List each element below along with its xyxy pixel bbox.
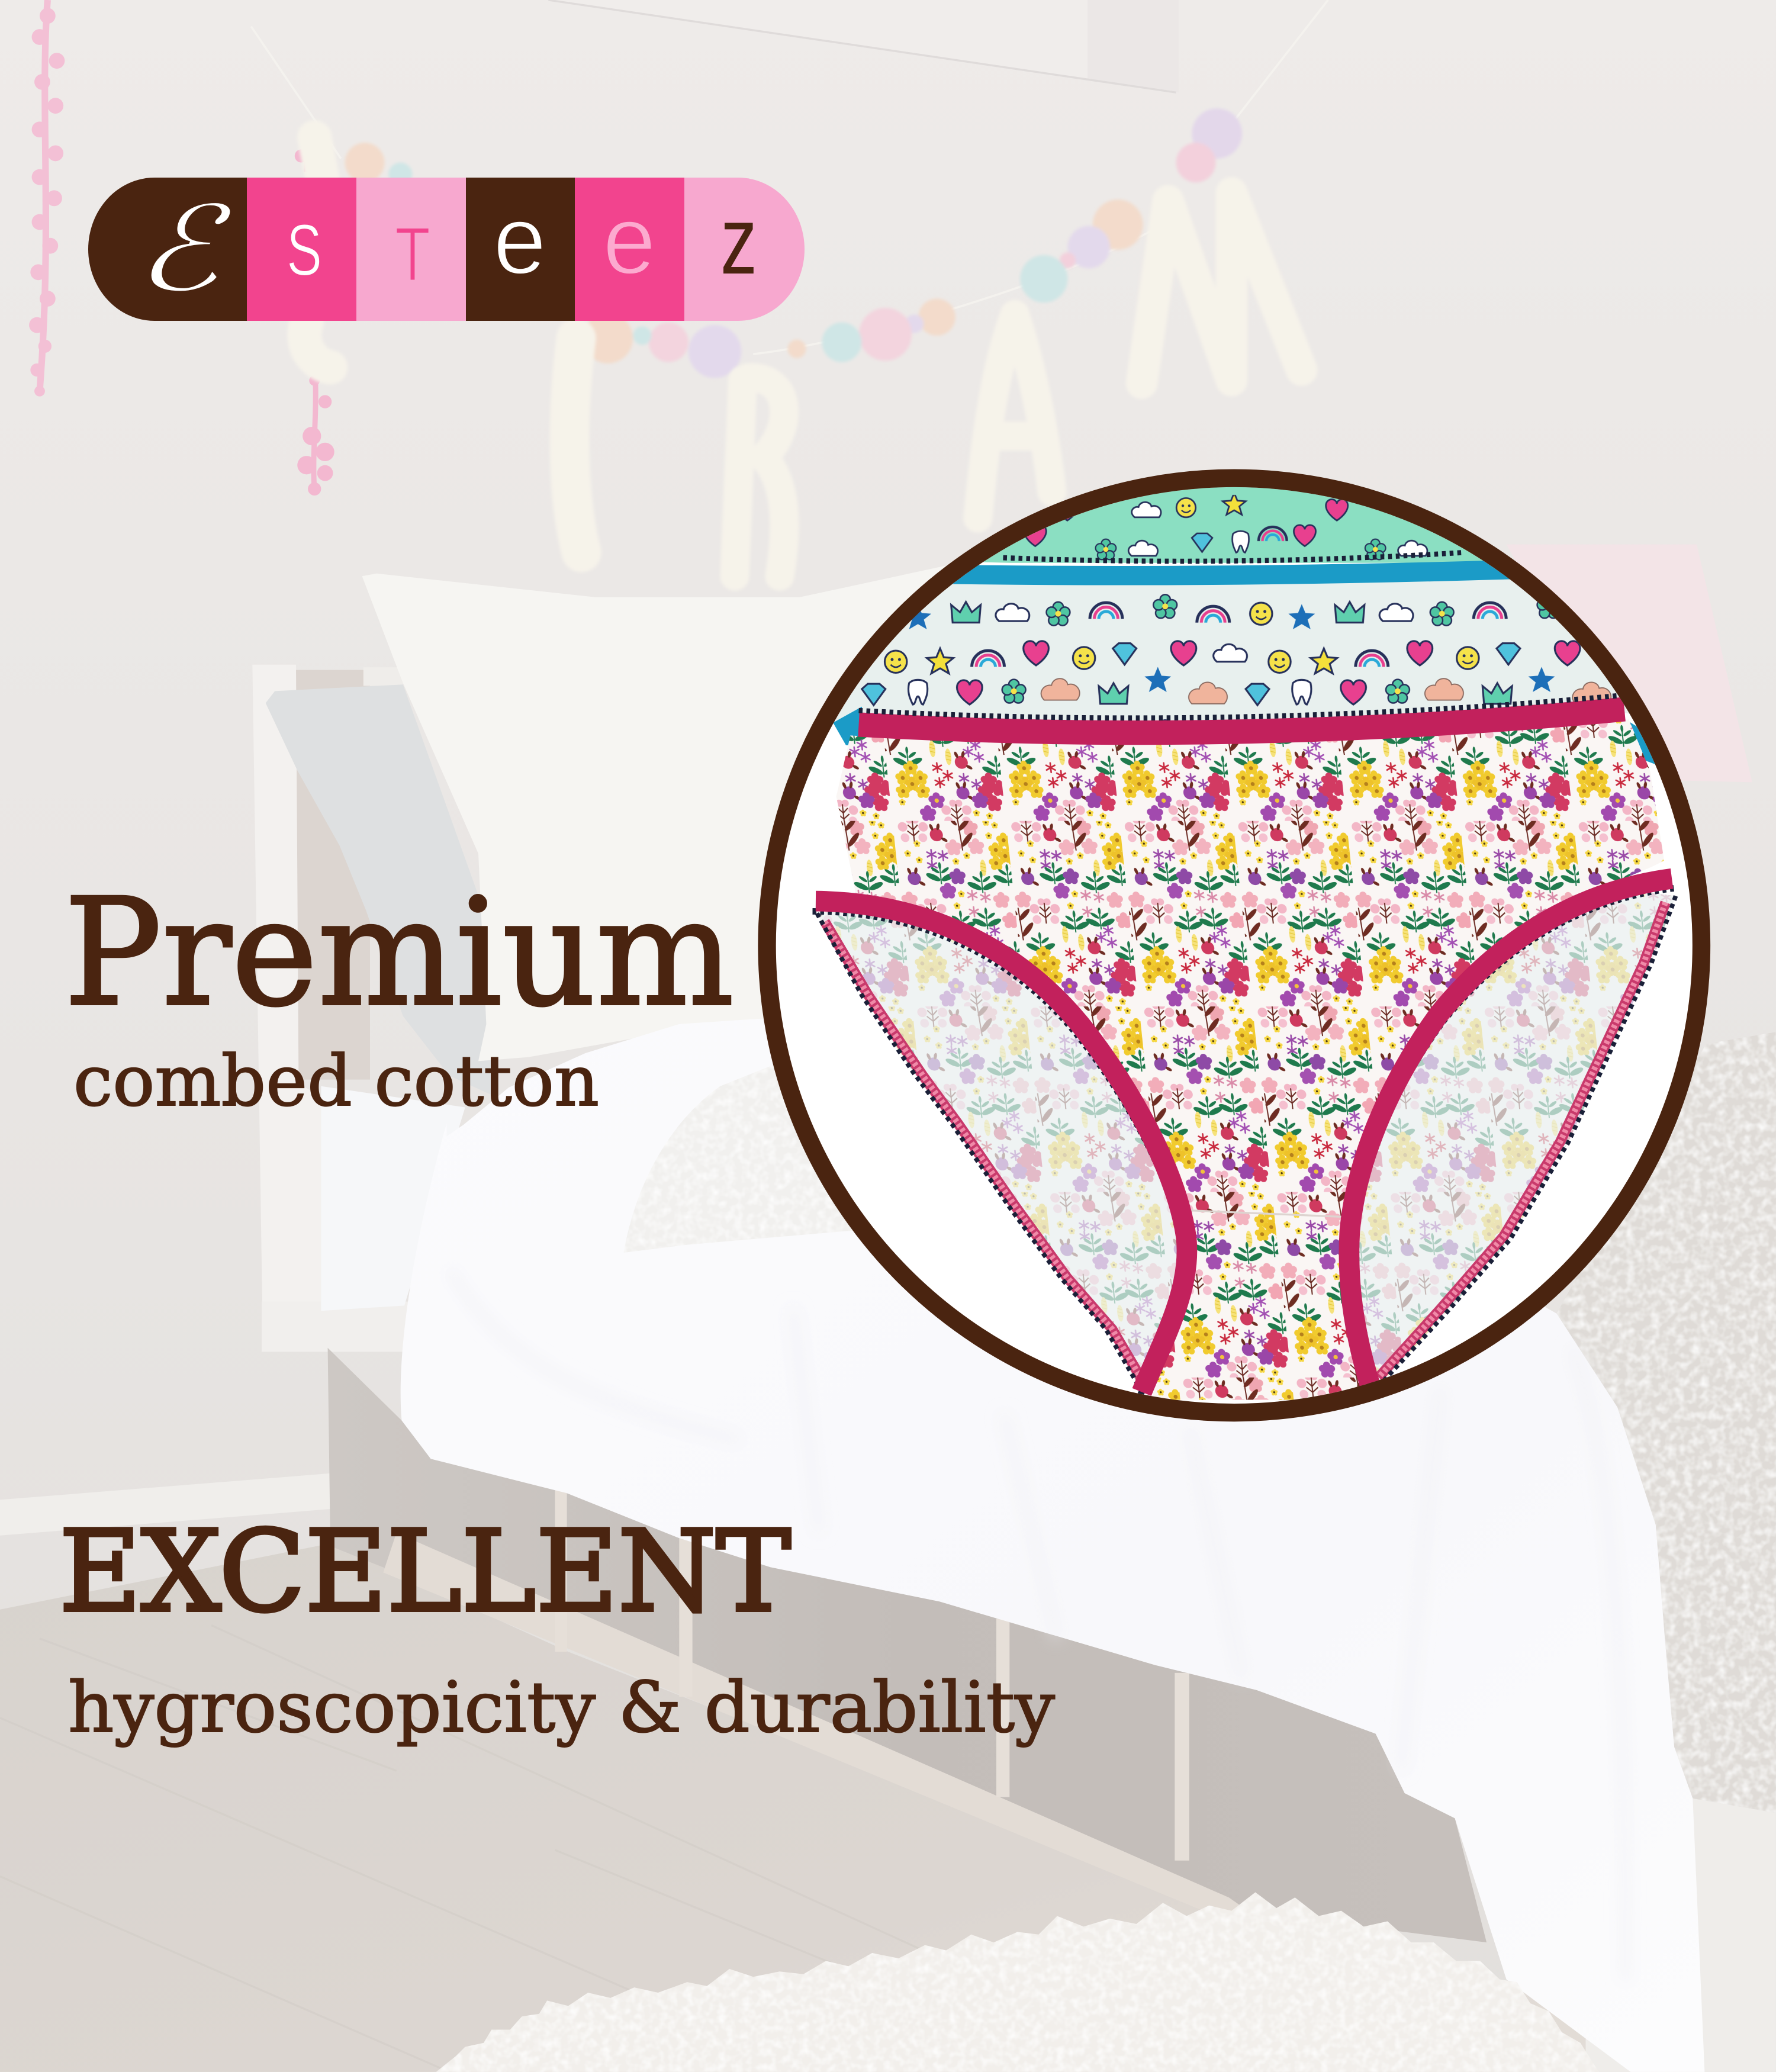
wall poster frame [548,0,1179,92]
logo letter t: T [395,211,430,297]
gusset seam [1189,1211,1343,1217]
duvet folds [449,1269,1625,1982]
blue band peeking at sides [833,707,1659,765]
circle white fill [775,486,1694,1405]
product circle [767,475,1701,1413]
logo letter s: S [287,210,322,291]
headboard panel [252,665,420,1352]
fluffy throw right [1556,1032,1776,1813]
mint garment layer [983,487,1485,563]
garland string [251,0,1328,354]
front panel floral print [836,719,1664,1399]
subheading: hygroscopicity & durability: hygroscopicity & durability [68,1666,1055,1748]
floor boards [0,1625,1189,2072]
logo letter E: ℰ [134,181,232,318]
icon print garment layer [836,575,1651,732]
back panel pale floral [817,835,1676,1394]
white pillow [362,562,964,1061]
logo letter z: z [720,187,757,294]
floor [0,1543,1776,2072]
main waistband [859,695,1624,733]
felt letters on garland [304,137,1302,576]
heading: EXCELLENT: EXCELLENT [59,1507,791,1637]
mattress sheet [321,1086,465,1311]
leg elastic bands [813,879,1674,1399]
shaggy rug [436,1892,1599,2072]
lower wall baseboard [0,1473,330,1536]
garment photo clipped to circle [813,475,1676,1399]
bed rail [383,1533,1255,1919]
lower right floor [1586,1797,1776,2072]
logo stripes [88,178,805,321]
garland felt balls [345,108,1242,378]
logo letter e: e [493,185,546,294]
lamp shade [1507,545,1752,782]
logo letter e pink: e [603,185,656,294]
grey pillow [266,684,496,1097]
heading: Premium: Premium [64,867,734,1039]
hem stitching [817,896,1676,1394]
blue waistband [952,552,1520,575]
pink pom-pom string left [29,0,65,397]
circle ring [767,478,1701,1413]
white duvet [401,1019,1704,2072]
subheading: combed cotton: combed cotton [73,1040,599,1122]
bed underside [328,1348,1487,1942]
bed slats [555,1487,1189,1861]
fluffy throw on bed [624,1057,872,1253]
logo: Esteez stripes [88,178,805,321]
pink pom-pom string centre [295,130,334,496]
